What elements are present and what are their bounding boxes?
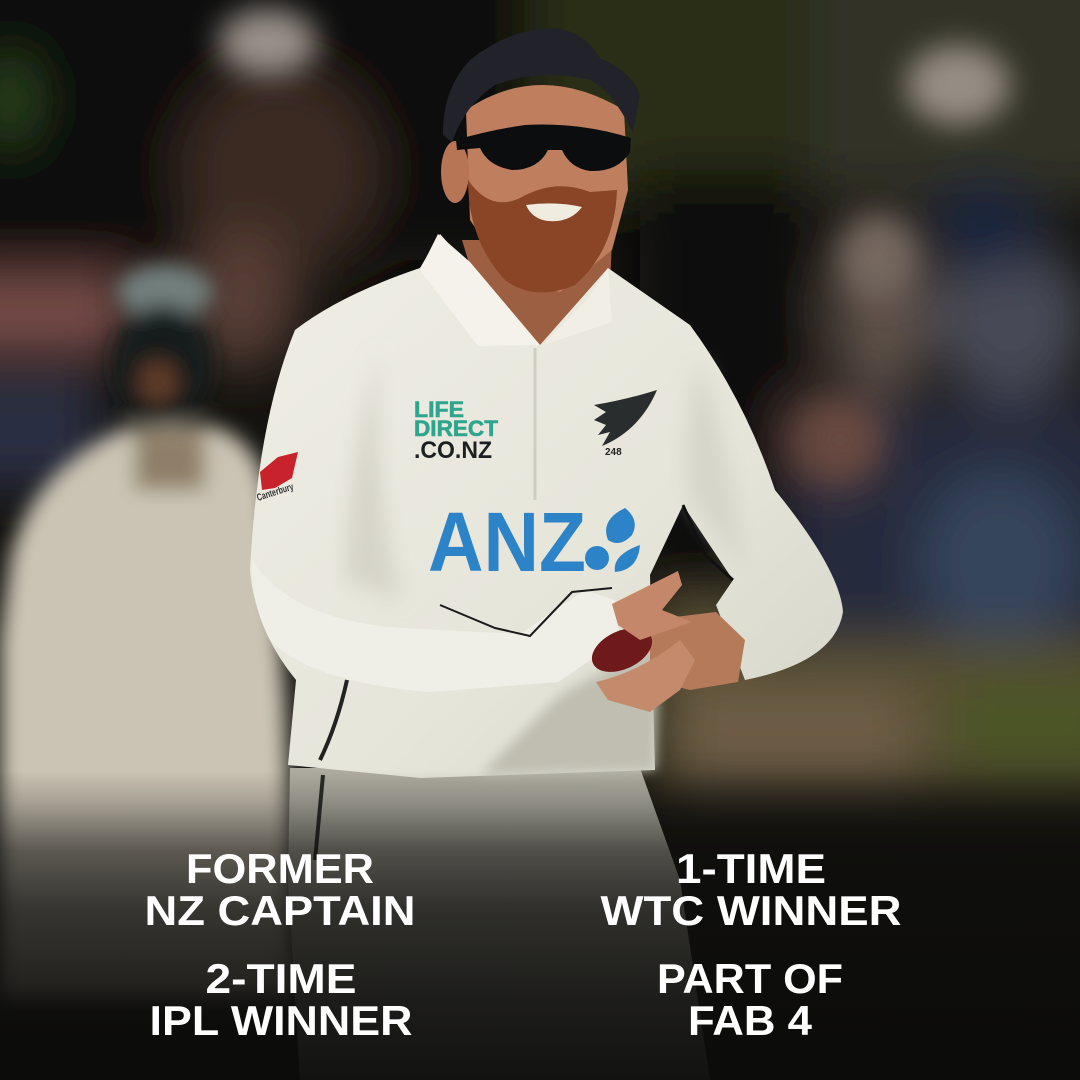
shirt: torso and arms: [250, 234, 843, 778]
text block: part of Fab 4: FAB 4: [688, 997, 813, 1044]
cap: [443, 28, 640, 142]
text block: part of Fab 4: [657, 955, 843, 1044]
neck: [462, 240, 612, 350]
text block: former NZ captain: [144, 845, 416, 934]
black edge at arm: [683, 505, 733, 580]
text block: 1-time WTC winner: 1-TIME: [676, 845, 826, 892]
text block: 2-time IPL winner: IPL WINNER: [150, 997, 412, 1044]
side trims: [320, 680, 347, 760]
text block: 1-time WTC winner: [600, 845, 902, 934]
logo: Life Direct sponsor: .CO.NZ: [414, 437, 492, 464]
text block: 1-time WTC winner: WTC WINNER: [600, 887, 902, 934]
main player figure: [250, 28, 843, 1080]
bottom dark gradient: [0, 770, 1080, 1080]
hand and ball: [650, 612, 745, 690]
logo: ANZ sponsor: ANZ: [428, 495, 586, 589]
logo: Canterbury: [256, 452, 298, 504]
collar: [420, 234, 540, 346]
logo: Life Direct sponsor: LIFE: [414, 397, 464, 422]
logo: Canterbury: Canterbury: [256, 482, 295, 504]
logo: Life Direct sponsor: DIRECT: [414, 416, 499, 441]
text block: 2-time IPL winner: 2-TIME: [206, 955, 356, 1002]
blurred background player: [0, 264, 295, 1000]
trousers: [288, 768, 710, 1080]
text block: part of Fab 4: PART OF: [657, 955, 843, 1002]
text block: former NZ captain: FORMER: [186, 845, 374, 892]
icon: silver fern badge: [594, 390, 657, 458]
text block: former NZ captain: NZ CAPTAIN: [144, 887, 416, 934]
shirt shading: [345, 350, 400, 600]
head: [466, 85, 628, 292]
logo: Life Direct sponsor: [414, 397, 499, 464]
icon: silver fern badge: 248: [605, 447, 622, 458]
forearm sleeve: [252, 560, 620, 692]
sunglasses: [456, 125, 631, 171]
placket line: [534, 348, 536, 500]
text block: 2-time IPL winner: [150, 955, 412, 1044]
beard: [468, 180, 617, 292]
smile: [526, 203, 582, 221]
